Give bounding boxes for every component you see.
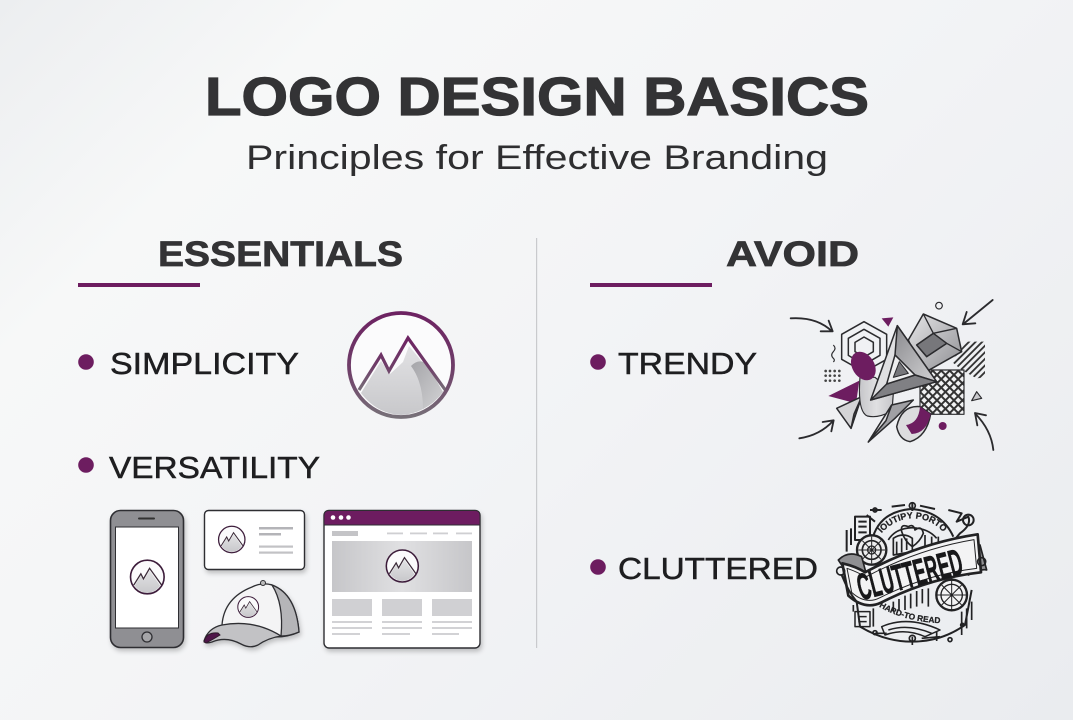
heading underline: avoid (590, 283, 712, 287)
icon: cluttered badge illustration: IOUTIPY PORTO (878, 512, 946, 533)
panel: essentials (78, 234, 480, 648)
subtitle: Principles for Effective Branding (246, 139, 828, 177)
icon: browser window (324, 510, 480, 648)
label: versatility: VERSATILITY (109, 450, 320, 485)
divider (536, 238, 537, 648)
bullet: trendy (590, 354, 606, 370)
label: trendy: TRENDY (618, 346, 757, 381)
bullet: cluttered (590, 559, 606, 575)
heading: essentials: ESSENTIALS (158, 234, 403, 274)
icon: trendy geometric illustration (791, 300, 993, 450)
icon: mountain logo (349, 313, 453, 417)
heading underline: essentials (78, 283, 200, 287)
icon: cluttered badge illustration: HARD-TO READ (879, 603, 940, 624)
label: simplicity: SIMPLICITY (110, 346, 299, 381)
bullet: versatility (78, 457, 94, 473)
arrows (791, 300, 993, 450)
icon: business card (204, 510, 304, 570)
panel: avoid (590, 234, 994, 645)
label: cluttered: CLUTTERED (618, 551, 818, 586)
heading: avoid: AVOID (726, 234, 859, 274)
icon: cluttered badge illustration (836, 502, 988, 645)
bullet: simplicity (78, 354, 94, 370)
title: LOGO DESIGN BASICS (205, 67, 869, 127)
icon: phone (110, 510, 184, 648)
icon: cap (204, 580, 299, 647)
